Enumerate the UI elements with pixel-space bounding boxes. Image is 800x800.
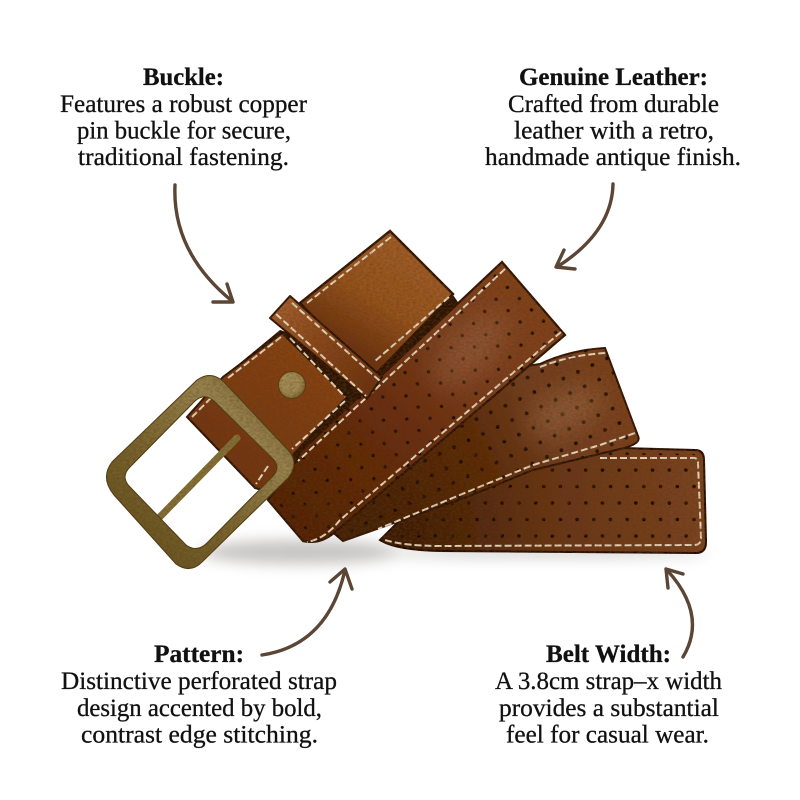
strap: front buckle end — [187, 333, 347, 490]
text: leather description: leather with a retro, — [514, 118, 714, 144]
text: belt width description: feel for casual wear. — [506, 722, 709, 748]
buckle frame — [106, 375, 294, 569]
buckle — [106, 375, 294, 569]
text: leather description: Crafted from durable — [508, 91, 719, 118]
callout: buckle — [60, 64, 308, 171]
strap: bottom coil — [380, 440, 706, 553]
text: pattern description — [61, 668, 337, 748]
strap: main perforated coil — [268, 262, 565, 542]
text: belt width description: provides a substantial — [499, 695, 719, 722]
text: buckle description: traditional fastening. — [78, 144, 289, 171]
text: buckle description: Features a robust copper — [60, 91, 308, 118]
text: buckle description — [60, 91, 308, 171]
text: pattern description: design accented by bold, — [77, 695, 322, 722]
callout: genuine leather — [485, 64, 741, 171]
text: leather description — [485, 91, 741, 171]
rivet — [278, 372, 306, 398]
buckle pin — [150, 438, 237, 527]
text: pattern description: Distinctive perforated strap — [61, 668, 337, 695]
belt loop — [270, 296, 382, 399]
strap: third coil — [330, 348, 639, 541]
callout: pattern — [61, 641, 337, 748]
text: pattern description: contrast edge stitching. — [81, 722, 318, 748]
belt photo — [106, 231, 706, 569]
heading: Genuine Leather: Genuine Leather: — [519, 64, 708, 91]
arrow: buckle — [175, 185, 233, 302]
heading: Pattern: Pattern: — [154, 641, 244, 668]
strap: top tail end — [300, 231, 453, 378]
text: belt width description: A 3.8cm strap–x width — [495, 668, 722, 695]
heading: Buckle: Buckle: — [143, 64, 224, 91]
arrow: pattern — [262, 569, 352, 655]
strap: dark layered edge — [223, 295, 460, 480]
text: belt width description — [495, 668, 722, 748]
arrow: genuine leather — [556, 184, 613, 269]
ground shadow — [200, 540, 710, 564]
heading: Belt Width: Belt Width: — [546, 641, 671, 668]
text: buckle description: pin buckle for secure, — [77, 118, 291, 144]
callout: belt width — [495, 641, 722, 748]
text: leather description: handmade antique finish. — [485, 144, 741, 171]
arrow: belt width — [666, 569, 692, 657]
